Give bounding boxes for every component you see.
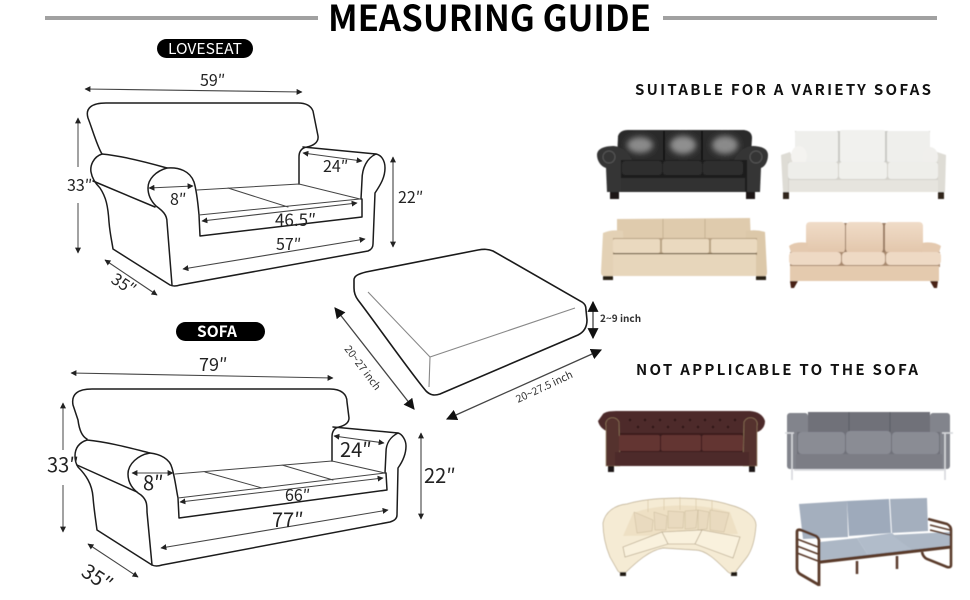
dimension labels: sofa: 35″: [77, 556, 119, 597]
dimension labels: sofa: 77″: [272, 504, 304, 533]
dimension labels: loveseat: 8″: [170, 186, 186, 210]
dimension labels: loveseat: 22″: [398, 184, 423, 208]
heading: not applicable sofas: NOT APPLICABLE TO THE SOFA: [636, 359, 918, 380]
dimension labels: sofa: 79″: [199, 351, 228, 377]
dimensions: loveseat arrows: [78, 89, 393, 295]
dimension labels: sofa: [47, 351, 456, 597]
label: sofa pill: SOFA: [197, 320, 237, 342]
label: loveseat pill: LOVESEAT: [168, 38, 242, 59]
drawing: loveseat outline: [87, 103, 385, 286]
dimension labels: sofa: 33″: [47, 449, 79, 478]
label: sofa pill: [176, 320, 265, 342]
dimension labels: sofa: 66″: [285, 482, 310, 506]
dimension labels: cushion: 20~27 inch: [341, 342, 384, 393]
sofa: white fabric: [781, 130, 946, 199]
sofa: curved: [603, 497, 756, 576]
title: measuring guide: [45, 0, 937, 42]
sofa: grey cube with chrome frame: [785, 412, 953, 480]
sofa: beige fabric: [601, 218, 767, 280]
sofa: chesterfield: [598, 411, 765, 472]
panel: seat cushion diagram: [335, 249, 641, 419]
dimension labels: loveseat: 24″: [323, 153, 348, 177]
panel: not applicable sofa photos: [598, 411, 953, 586]
dimension labels: cushion: 20~27.5 inch: [513, 367, 575, 407]
dimension labels: sofa: 8″: [143, 467, 164, 496]
dimension labels: loveseat: 33″: [67, 172, 92, 196]
dimension labels: loveseat: 35″: [107, 266, 142, 300]
panel: sofa diagram: [47, 320, 456, 597]
dimension labels: sofa: 22″: [424, 460, 456, 489]
heading: suitable sofas: SUITABLE FOR A VARIETY SOFAS: [635, 79, 931, 100]
dimension labels: loveseat: [67, 67, 423, 300]
drawing: sofa outline: [73, 389, 406, 566]
dimension labels: cushion: [341, 310, 641, 407]
sofa: black leather: [597, 130, 768, 199]
sofa: tan leather: [789, 222, 941, 288]
dimensions: sofa arrows: [63, 373, 421, 577]
panel: suitable sofa photos: [597, 130, 946, 288]
panel: loveseat diagram: [67, 38, 423, 300]
drawing: cushion outline: [354, 249, 587, 395]
sofa: wood frame: [797, 498, 951, 586]
dimension labels: loveseat: 57″: [276, 231, 301, 255]
dimension labels: loveseat: 46.5″: [275, 206, 316, 231]
dimensions: cushion arrows: [335, 302, 601, 419]
dimension labels: sofa: 24″: [340, 434, 372, 463]
dimension labels: loveseat: 59″: [200, 67, 225, 91]
dimension labels: cushion: 2~9 inch: [600, 310, 641, 325]
